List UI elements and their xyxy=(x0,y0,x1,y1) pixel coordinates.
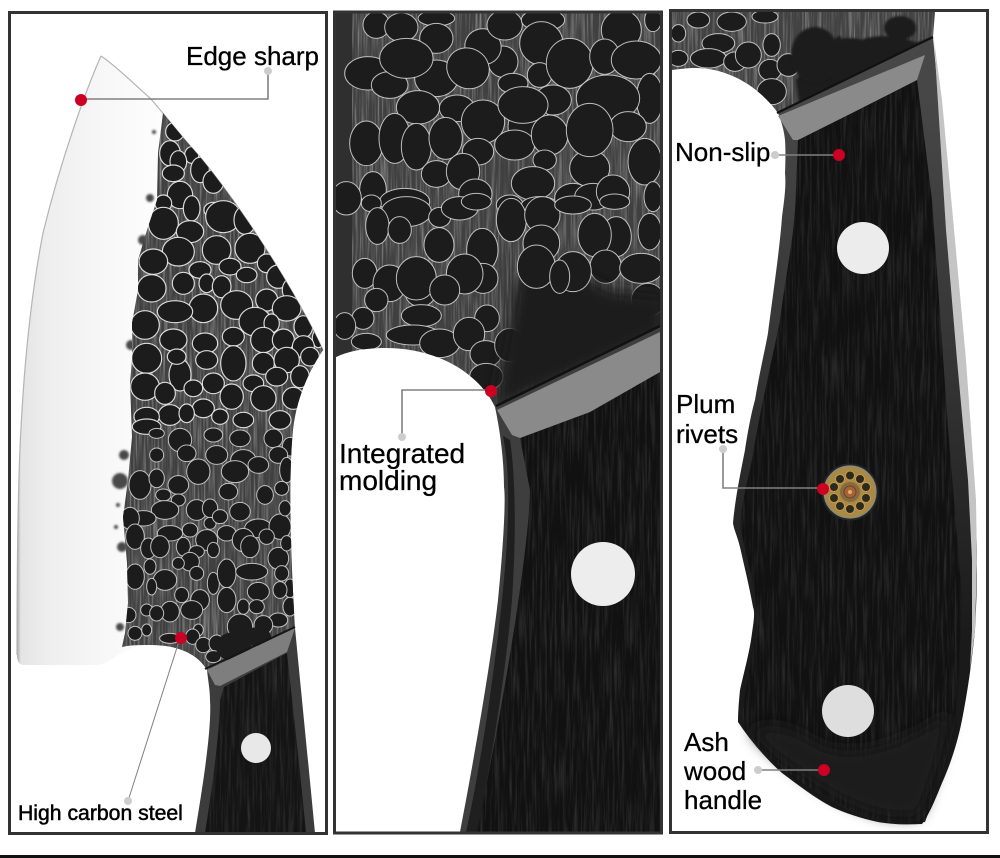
callout: Integrated molding xyxy=(339,385,497,496)
callout: Plum rivets xyxy=(676,389,829,495)
hammered steel texture xyxy=(122,113,323,670)
guard band xyxy=(207,628,295,686)
guard line on handle xyxy=(777,37,933,113)
steel spine highlight xyxy=(934,40,977,670)
callout: Edge sharp xyxy=(75,41,319,106)
handle wood full xyxy=(740,80,962,823)
callout: Edge sharp: Edge sharp xyxy=(186,41,319,71)
callout: Ash wood handle: Ash xyxy=(684,727,729,757)
panel 2 frame xyxy=(334,12,662,833)
panel: full knife with blade and handle xyxy=(10,12,330,834)
handle butt tone xyxy=(750,712,950,817)
panel: handle close-up xyxy=(669,10,988,832)
bottom rivet xyxy=(822,685,874,737)
dark forge scale corner xyxy=(492,265,665,412)
handle outline bevel xyxy=(733,37,977,824)
blade remnant with hammered texture xyxy=(669,10,937,117)
soft forge spots on polished steel xyxy=(112,130,156,631)
handle bevel close-up xyxy=(460,327,660,832)
panel 3 frame xyxy=(670,10,988,832)
handle wood close-up xyxy=(477,372,660,832)
callout: Integrated molding: Integrated xyxy=(339,438,465,469)
wood grain close-up xyxy=(477,372,660,832)
handle: wood xyxy=(205,653,306,833)
callout: Integrated molding: molding xyxy=(339,465,437,496)
dark blob xyxy=(791,16,920,83)
guard line xyxy=(205,627,295,669)
guard band close-up xyxy=(497,332,660,438)
hammered steel close-up xyxy=(331,8,665,413)
callout: Ash wood handle: wood xyxy=(683,756,746,786)
callout: Ash wood handle xyxy=(683,727,830,815)
dark scale area xyxy=(795,34,928,102)
bevel inner shadow xyxy=(466,436,515,832)
blade edge highlight xyxy=(17,56,323,655)
callout: Non-slip: Non-slip xyxy=(675,137,770,167)
callout: High carbon steel xyxy=(18,632,187,825)
callout: Plum rivets: Plum xyxy=(676,389,735,419)
top rivet xyxy=(837,222,889,274)
panel 1 frame xyxy=(10,12,326,834)
guard line close-up xyxy=(496,326,660,406)
bottom black rule xyxy=(0,855,1000,858)
handle: bevel frame xyxy=(195,628,315,833)
handle rivet close-up xyxy=(571,542,635,606)
guard band on handle xyxy=(778,55,925,140)
callout: Ash wood handle: handle xyxy=(684,785,762,815)
pebbles over scale corner xyxy=(517,245,591,293)
mosaic rivet xyxy=(822,464,878,520)
left dark strip xyxy=(336,13,352,358)
wood grain full xyxy=(740,80,962,823)
handle rivet xyxy=(241,733,271,763)
callout: High carbon steel: High carbon steel xyxy=(18,802,183,825)
panel: blade to handle junction close-up xyxy=(331,8,665,833)
callout: Non-slip xyxy=(675,137,845,167)
blade: polished steel xyxy=(17,60,100,665)
wood grain xyxy=(205,653,306,833)
callout: Plum rivets: rivets xyxy=(676,419,738,449)
